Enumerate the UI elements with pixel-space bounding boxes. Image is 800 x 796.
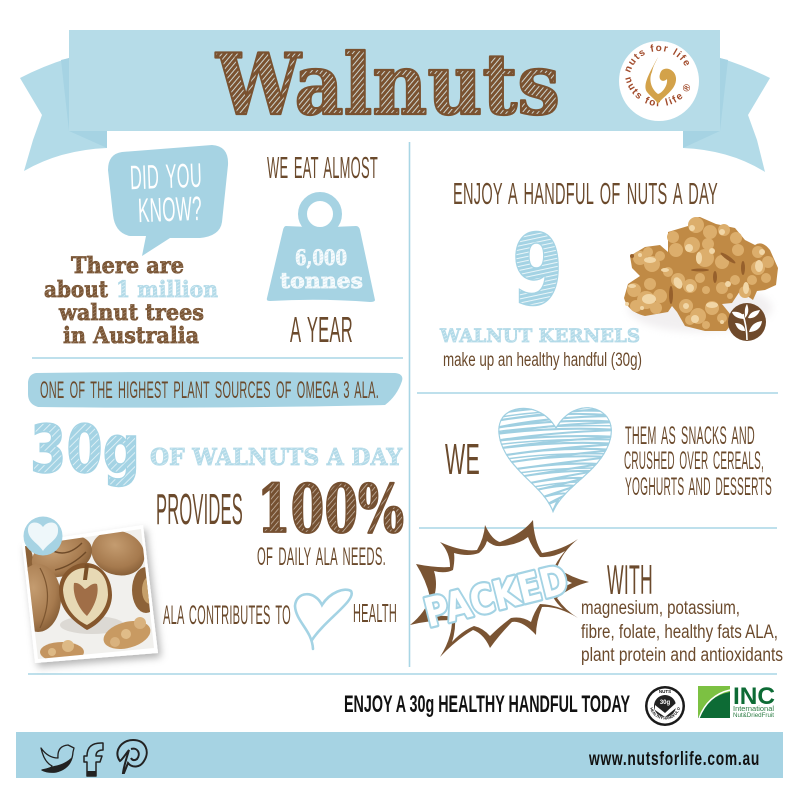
text: OF DAILY ALA NEEDS. bbox=[257, 543, 386, 571]
text: PROVIDES bbox=[156, 485, 243, 534]
icon: weight 6,000 tonnes bbox=[267, 196, 375, 302]
text: HEALTH bbox=[353, 598, 397, 628]
icon: weight 6,000 tonnes: tonnes bbox=[280, 268, 363, 293]
fact: 1 million walnut trees bbox=[44, 253, 218, 349]
icon: scribble heart bbox=[495, 407, 620, 513]
icon: heart outline bbox=[295, 590, 352, 649]
fact: 1 million walnut trees: There are bbox=[71, 253, 184, 279]
stat: 30g: 30g bbox=[30, 411, 140, 488]
text: WITH bbox=[607, 556, 653, 603]
logo: nuts for life bbox=[619, 41, 699, 121]
icon: leaf badge bbox=[728, 303, 766, 341]
speech bubble: did you know: KNOW? bbox=[137, 190, 203, 230]
fact: 1 million walnut trees: about bbox=[44, 277, 109, 303]
speech bubble: did you know: DID YOU bbox=[129, 157, 203, 197]
speech bubble: did you know bbox=[108, 145, 228, 256]
section dividers bbox=[28, 142, 778, 674]
fact: 1 million walnut trees: 1 million bbox=[116, 277, 218, 303]
icon: heart badge on photo bbox=[24, 516, 62, 556]
icon: starburst with packed bbox=[410, 520, 589, 657]
title: Walnuts bbox=[215, 35, 560, 134]
text: WE bbox=[445, 435, 480, 484]
image: walnut kernels pile bbox=[624, 217, 778, 332]
text: nutrients: magnesium, potassium, bbox=[581, 598, 740, 619]
text: nutrients bbox=[581, 598, 783, 666]
text: A YEAR bbox=[290, 309, 353, 350]
logo: nuts for life: nuts for life ® bbox=[625, 77, 690, 106]
icon: pinterest bbox=[117, 740, 147, 773]
icon: weight 6,000 tonnes: 6,000 bbox=[295, 245, 347, 270]
text: ONE OF THE HIGHEST PLANT SOURCES OF OMEGA 3 ALA. bbox=[40, 377, 379, 404]
text: healthy handful: make up an healthy handful (30g) bbox=[443, 350, 642, 371]
icon: starburst with packed: PACKED bbox=[420, 557, 573, 637]
text: WE EAT ALMOST bbox=[267, 150, 378, 185]
icon: twitter bbox=[41, 745, 74, 772]
logo: healthy handful badge: NUTS bbox=[659, 689, 671, 694]
logo: healthy handful badge bbox=[645, 686, 685, 726]
logo: INC: International bbox=[733, 704, 774, 713]
icon: facebook bbox=[84, 743, 103, 776]
text: walnut kernels: WALNUT KERNELS bbox=[439, 325, 640, 347]
stat: 100%: 100% bbox=[257, 470, 404, 548]
text: snacks and cereals bbox=[624, 422, 772, 501]
logo: INC: INC bbox=[733, 683, 775, 710]
text: ALA CONTRIBUTES TO bbox=[163, 600, 291, 630]
logo: INC: Nut&DriedFruit bbox=[733, 712, 774, 719]
ribbon banner bbox=[20, 30, 770, 172]
logo: INC bbox=[698, 683, 775, 719]
logo: healthy handful badge: HEALTHY HANDFUL DAILY bbox=[650, 707, 680, 720]
text: of walnuts a day: OF WALNUTS A DAY bbox=[150, 444, 403, 471]
photo: halved walnuts bbox=[15, 524, 160, 665]
fact: 1 million walnut trees: walnut trees bbox=[58, 300, 204, 326]
fact: 1 million walnut trees: in Australia bbox=[63, 323, 199, 349]
omega 3 strip bbox=[28, 372, 402, 408]
logo: nuts for life: nuts for life bbox=[625, 44, 689, 72]
stat: 9: 9 bbox=[512, 214, 563, 328]
footer bar bbox=[16, 732, 783, 778]
logo: healthy handful badge: 30g bbox=[660, 700, 671, 706]
